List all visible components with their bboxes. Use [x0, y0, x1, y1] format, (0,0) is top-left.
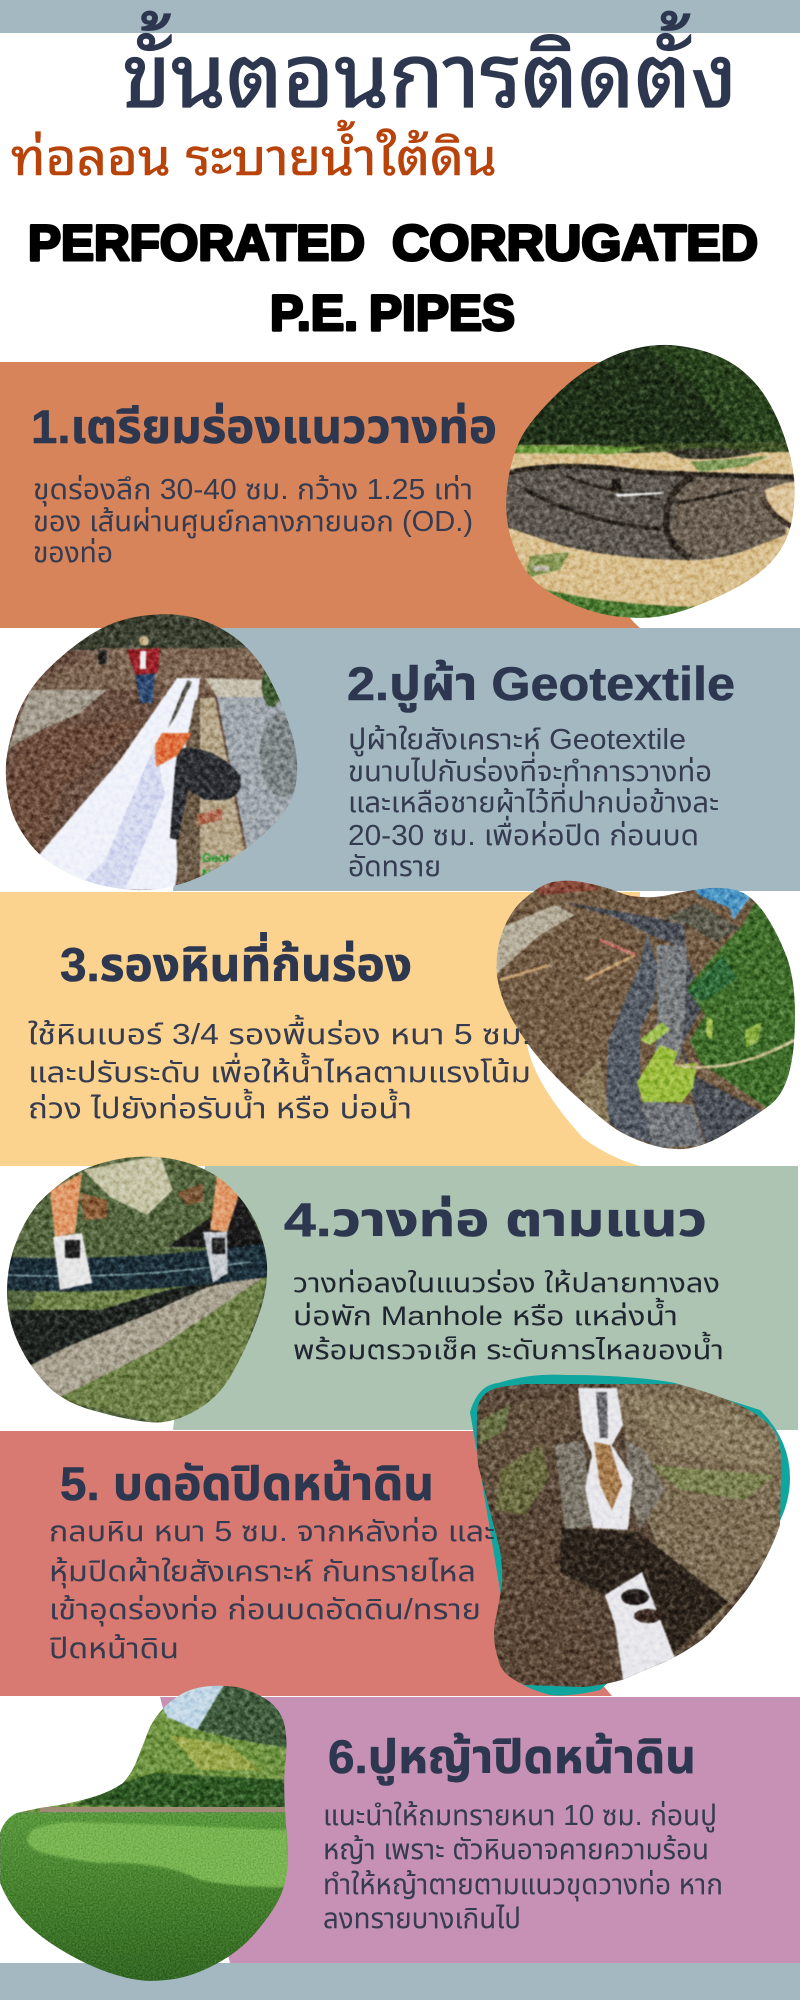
heading: 6.ปูหญ้าปิดหน้าดิน	[328, 1730, 696, 1785]
english heading: P.E.	[270, 285, 358, 341]
panel: step 5	[0, 1375, 800, 1696]
body text: และเหลือชายผ้าไว้ที่ปากบ่อข้างละ	[348, 782, 719, 819]
body text: ขุดร่องลึก 30-40 ซม. กว้าง 1.25 เท่า	[33, 474, 473, 506]
photo: backfilled trench	[476, 1384, 782, 1687]
body text: 20-30 ซม. เพื่อห่อปิด ก่อนบด	[348, 815, 699, 852]
top bar	[0, 0, 800, 33]
english heading	[28, 215, 758, 341]
body text: ขนาบไปกับร่องที่จะทำการวางท่อ	[348, 751, 712, 788]
heading: 5. บดอัดปิดหน้าดิน	[60, 1457, 434, 1510]
body text	[33, 474, 473, 569]
body text: ของท่อ	[33, 537, 113, 569]
body text: หุ้มปิดผ้าใยสังเคราะห์ กันทรายไหล	[49, 1556, 476, 1588]
body text: อัดทราย	[348, 851, 441, 883]
body text: เข้าอุดร่องท่อ ก่อนบดอัดดิน/ทราย	[49, 1594, 481, 1626]
photo: laying geotextile: N	[202, 867, 211, 881]
subtitle: ท่อลอน ระบายน้ำใต้ดิน	[11, 120, 497, 186]
bottom bar	[0, 1963, 800, 2000]
heading: 2.ปูผ้า Geotextile	[347, 657, 735, 712]
body text	[28, 1014, 531, 1125]
body text	[348, 724, 719, 883]
body text: ปิดหน้าดิน	[49, 1633, 179, 1665]
photo: artificial turf green	[0, 1680, 300, 1987]
photo: placing the pipe	[7, 1156, 268, 1422]
body text: กลบหิน หนา 5 ซม. จากหลังท่อ และ	[49, 1516, 495, 1548]
english heading: PERFORATED	[28, 215, 365, 271]
photo: gravel bed in trench	[490, 875, 800, 1160]
body text: และปรับระดับ เพื่อให้น้ำไหลตามแรงโน้ม	[28, 1052, 531, 1089]
heading: 3.รองหินที่ก้นร่อง	[60, 932, 412, 991]
body text: ปูผ้าใยสังเคราะห์ Geotextile	[348, 724, 686, 757]
panel: step 6	[0, 1680, 800, 2000]
body text: ทำให้หญ้าตายตามแนวขุดวางท่อ หาก	[323, 1869, 723, 1901]
teal blob behind photo	[470, 1375, 790, 1695]
body text	[49, 1516, 495, 1665]
panel: step 1	[0, 335, 800, 635]
body text: วางท่อลงในแนวร่อง ให้ปลายทางลง	[293, 1268, 720, 1298]
body text: แนะนำให้ถมทรายหนา 10 ซม. ก่อนปู	[323, 1800, 717, 1833]
panel: step 2	[0, 610, 800, 895]
english heading: PIPES	[369, 285, 515, 341]
body text: หญ้า เพราะ ตัวหินอาจคายความร้อน	[323, 1834, 709, 1866]
body text: ใช้หินเบอร์ 3/4 รองพื้นร่อง หนา 5 ซม.	[28, 1014, 531, 1051]
body text: ของ เส้นผ่านศูนย์กลางภายนอก (OD.)	[33, 506, 473, 539]
heading: 1.เตรียมร่องแนววางท่อ	[31, 400, 497, 453]
panel: step 4	[0, 1150, 798, 1435]
body text	[323, 1800, 723, 1935]
photo: laying geotextile	[0, 610, 305, 895]
photo: laying geotextile: Geot	[202, 851, 229, 865]
body text: บ่อพัก Manhole หรือ แหล่งน้ำ	[293, 1297, 678, 1331]
heading: 4.วางท่อ ตามแนว	[284, 1193, 707, 1246]
body text	[293, 1268, 724, 1365]
english heading: CORRUGATED	[392, 215, 758, 271]
photo: excavated trenches	[506, 344, 795, 618]
body text: ลงทรายบางเกินไป	[323, 1903, 521, 1935]
title: ขั้นตอนการติดตั้ง	[122, 11, 737, 126]
body text: พร้อมตรวจเช็ค ระดับการไหลของน้ำ	[293, 1331, 724, 1365]
body text: ถ่วง ไปยังท่อรับน้ำ หรือ บ่อน้ำ	[28, 1088, 412, 1125]
panel: step 3	[0, 875, 800, 1166]
